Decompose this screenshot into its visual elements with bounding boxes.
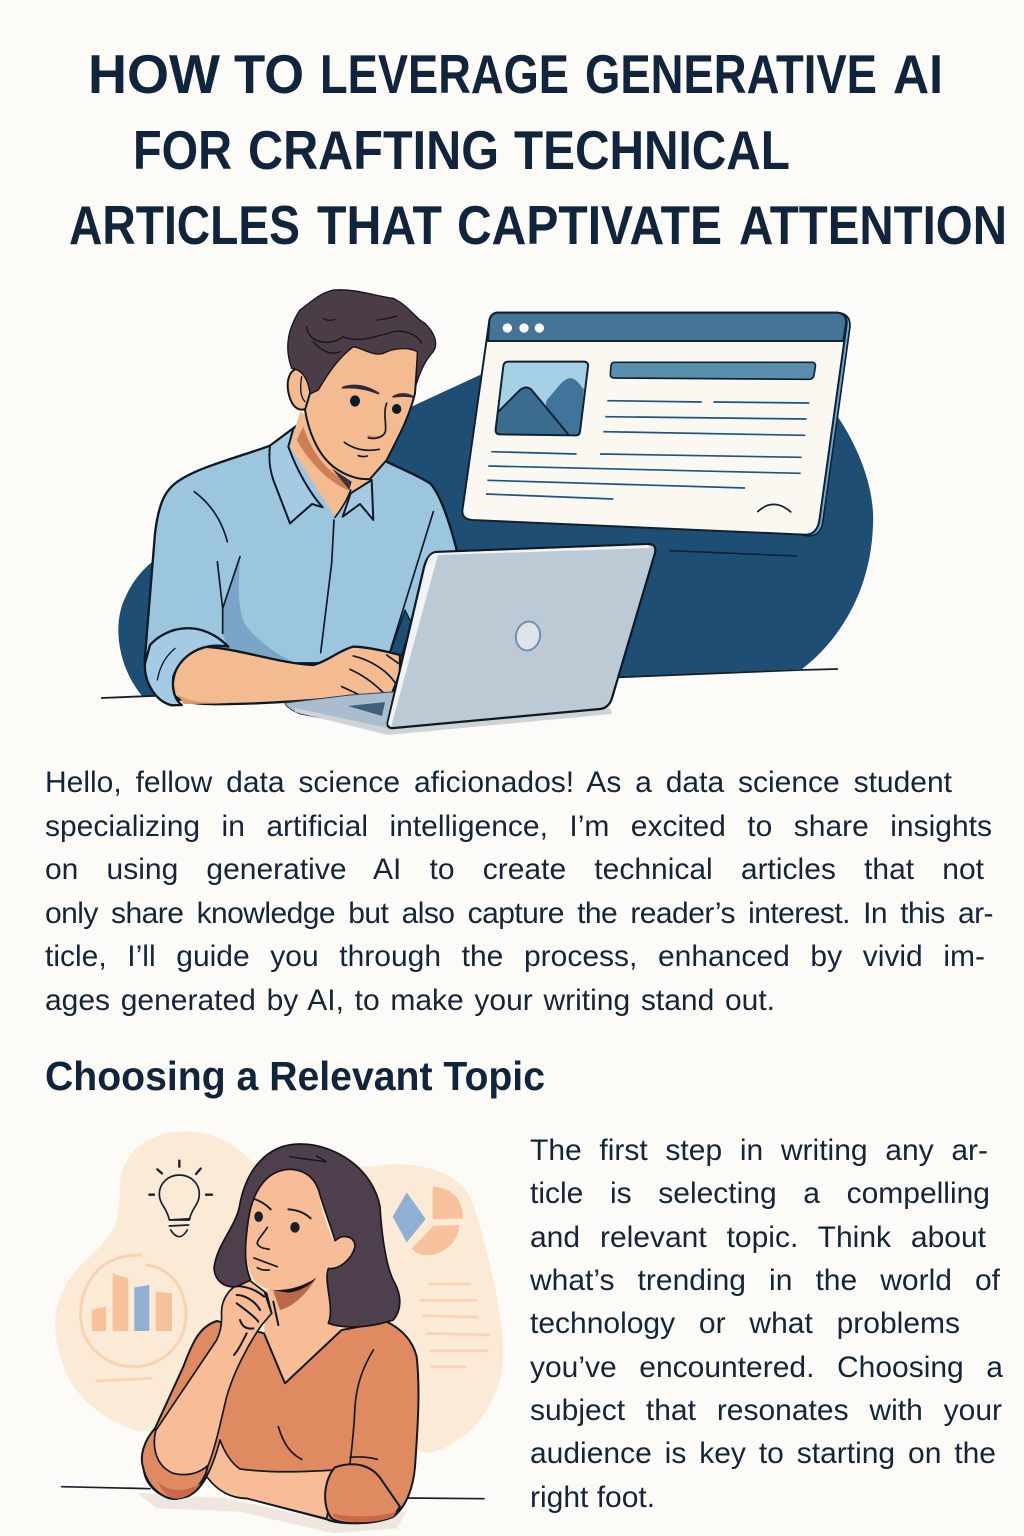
text lines	[486, 401, 809, 499]
face	[245, 1169, 355, 1290]
peach background blob	[55, 1132, 503, 1453]
ear	[288, 368, 313, 410]
title: TECHNICAL	[514, 119, 790, 181]
man	[145, 290, 457, 707]
left sleeve cuff	[142, 1428, 208, 1499]
woman	[142, 1144, 418, 1523]
intro paragraph: Hello, fellow data science aficionados! As a data science student	[45, 766, 952, 799]
faded text lines	[422, 1284, 488, 1367]
body paragraph: audience is key to starting on the	[530, 1437, 996, 1470]
body paragraph: The first step in writing any ar-	[530, 1134, 988, 1167]
browser window	[462, 313, 850, 556]
illustration: man working on a laptop with browser window	[100, 289, 874, 735]
desk line	[101, 669, 838, 698]
title: CAPTIVATE	[457, 194, 722, 256]
icon: light bulb	[149, 1161, 212, 1237]
icon: pie chart	[393, 1187, 463, 1255]
title	[69, 43, 1007, 256]
title: TO	[234, 43, 304, 105]
title: FOR	[133, 119, 232, 181]
hair	[288, 290, 436, 394]
title: GENERATIVE	[585, 43, 877, 105]
rolled cuff	[145, 628, 228, 705]
intro paragraph: ages generated by AI, to make your writing stand out.	[45, 984, 775, 1016]
right cuff	[325, 1464, 400, 1523]
body paragraph: technology or what problems	[530, 1307, 960, 1340]
nose and mouth	[254, 1227, 277, 1270]
title: AI	[893, 43, 943, 105]
title: LEVERAGE	[320, 43, 569, 105]
body paragraph: you’ve encountered. Choosing a	[530, 1351, 1003, 1384]
eyes and brows	[350, 395, 360, 407]
intro paragraph: ticle, I’ll guide you through the process, enhanced by vivid im-	[45, 940, 985, 973]
dark blue background blob	[118, 340, 873, 697]
section heading: Choosing a Relevant Topic	[45, 1053, 545, 1099]
eyes and brows	[254, 1211, 263, 1222]
body paragraph	[530, 1134, 1003, 1514]
image thumbnail	[496, 362, 588, 435]
icon: bar chart in circle	[81, 1255, 186, 1381]
body paragraph: and relevant topic. Think about	[530, 1221, 986, 1254]
title: THAT	[317, 194, 442, 256]
intro paragraph: on using generative AI to create technical articles that not	[45, 853, 984, 886]
bottom forearm	[207, 1440, 335, 1519]
headline bar	[610, 362, 815, 379]
title: ARTICLES	[69, 194, 300, 256]
body paragraph: ticle is selecting a compelling	[530, 1177, 990, 1210]
title: CRAFTING	[248, 119, 499, 181]
face	[305, 347, 418, 479]
illustration: woman thinking with chart icons	[55, 1132, 504, 1534]
title: HOW	[88, 43, 220, 105]
laptop logo	[513, 619, 543, 653]
neck	[290, 412, 387, 517]
laptop lid	[388, 544, 655, 728]
body paragraph: what’s trending in the world of	[530, 1264, 1000, 1297]
sweater	[143, 1321, 418, 1523]
hair	[214, 1144, 400, 1327]
collar	[269, 428, 323, 523]
intro paragraph: only share knowledge but also capture the reader’s interest. In this ar-	[45, 896, 993, 930]
desk line	[62, 1487, 484, 1499]
body paragraph: right foot.	[530, 1481, 655, 1514]
mouth	[344, 442, 379, 457]
neck	[264, 1267, 342, 1383]
shirt	[145, 423, 457, 705]
intro paragraph: specializing in artificial intelligence, I’m excited to share insights	[45, 810, 992, 842]
raised arm and hand	[154, 1281, 272, 1475]
laptop base	[285, 690, 420, 730]
intro paragraph	[45, 766, 993, 1016]
fold lines	[194, 492, 433, 653]
forearm and hand	[173, 647, 400, 707]
shirt shadow	[223, 557, 297, 663]
body paragraph: subject that resonates with your	[530, 1394, 1002, 1427]
laptop	[285, 544, 655, 735]
desk shadow	[137, 1493, 407, 1533]
